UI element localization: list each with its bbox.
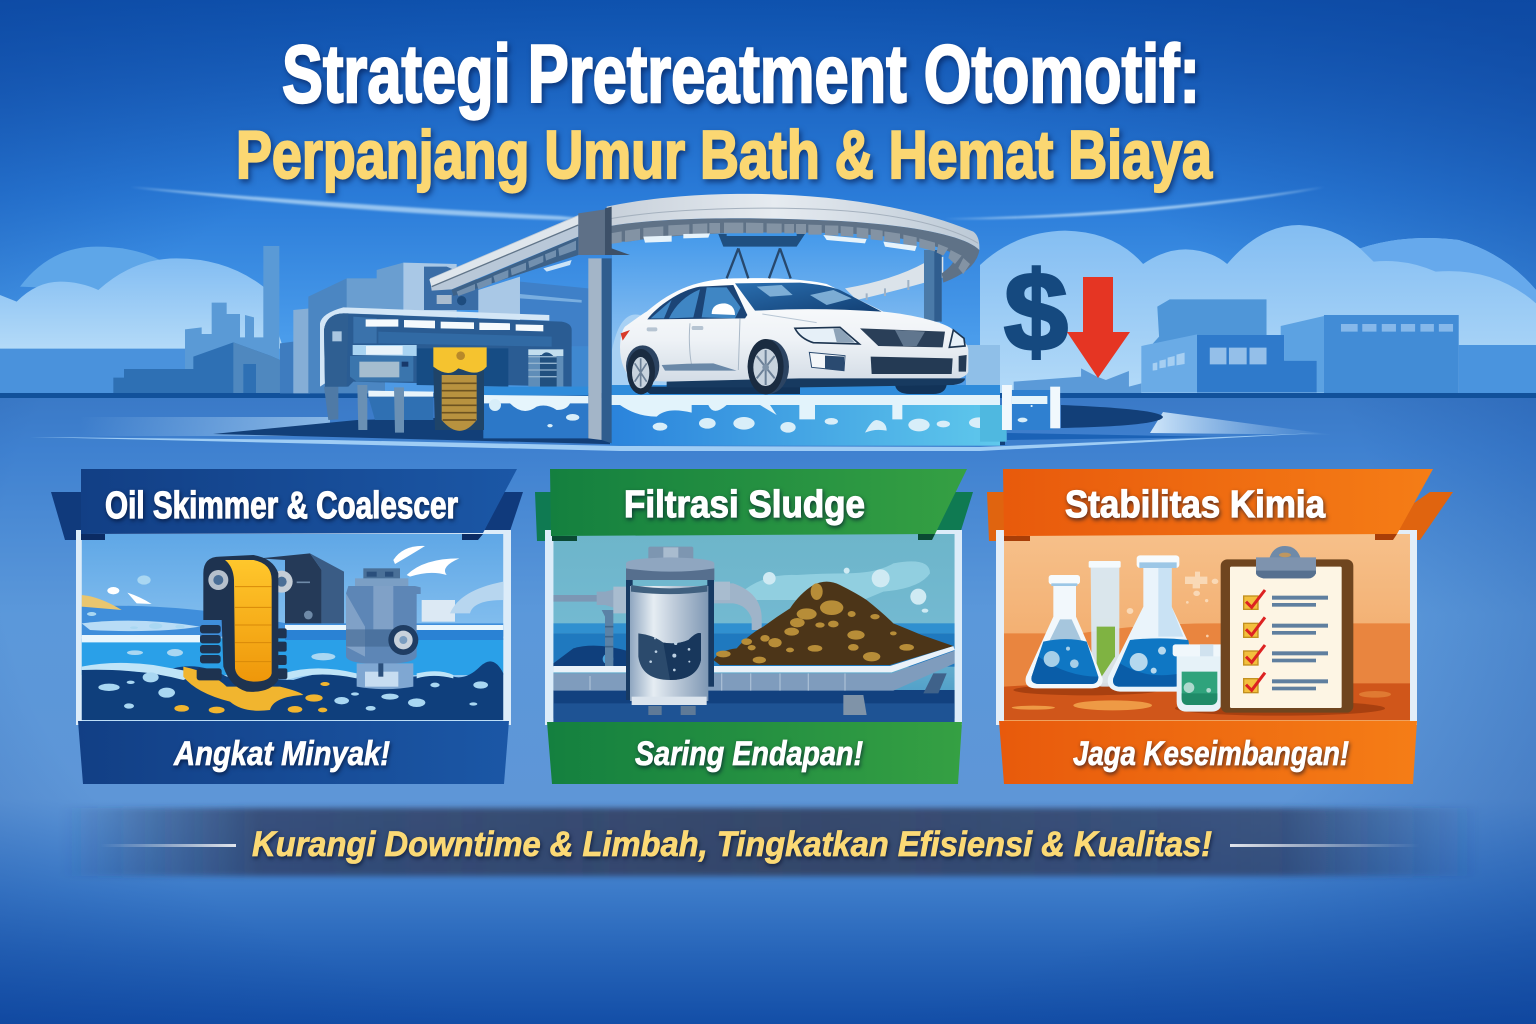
frame — [545, 530, 962, 725]
caption: Jaga Keseimbangan! — [1073, 735, 1349, 773]
factory skyline left — [0, 246, 283, 393]
dollar sign: $ — [1004, 249, 1068, 374]
caption band — [547, 722, 962, 784]
ribbon top — [1003, 469, 1433, 536]
caption band — [78, 721, 509, 784]
ribbon back — [987, 492, 1453, 541]
factory skyline right — [980, 225, 1536, 393]
ribbon back — [535, 492, 973, 541]
backdrop buildings — [280, 260, 588, 393]
card: sludge filtration — [535, 469, 973, 784]
caption band — [999, 721, 1417, 784]
ribbon top — [550, 469, 967, 536]
conveyor beam and steel column — [429, 207, 630, 443]
yellow skimmer unit — [433, 347, 487, 431]
back of the canopy — [845, 250, 943, 322]
ribbon back — [51, 492, 523, 540]
tank base light strip — [30, 433, 1320, 451]
illustration: filter and sludge — [553, 534, 955, 723]
frame — [76, 530, 511, 725]
filling machine — [320, 307, 572, 433]
conveyor strip — [607, 218, 979, 283]
caption: Angkat Minyak! — [173, 735, 390, 773]
frame — [996, 530, 1417, 725]
water tank — [610, 385, 1000, 446]
title — [236, 29, 1213, 193]
ribbon fold shadows — [81, 534, 483, 540]
water left section — [483, 387, 588, 438]
hanger — [718, 233, 805, 278]
heading: Oil Skimmer & Coalescer — [105, 485, 458, 527]
bottom banner — [60, 808, 1480, 876]
ribbon top — [81, 469, 517, 534]
ribbon fold shadows — [1004, 534, 1397, 541]
title line 2: Perpanjang Umur Bath & Hemat Biaya — [236, 117, 1213, 193]
factory and machine left — [280, 260, 588, 438]
banner text: Kurangi Downtime & Limbah, Tingkatkan Efisiensi & Kualitas! — [252, 825, 1212, 864]
ground band — [0, 393, 1536, 445]
arch surface — [607, 194, 979, 250]
heading: Filtrasi Sludge — [624, 484, 865, 526]
illustration: skimmer and coalescer — [82, 534, 503, 721]
ribbon fold shadows — [552, 534, 935, 541]
tank end section — [980, 385, 1060, 442]
caption: Saring Endapan! — [635, 735, 863, 773]
dollar cost icon — [1004, 249, 1130, 378]
heading: Stabilitas Kimia — [1065, 484, 1326, 526]
canopy lights — [643, 233, 917, 251]
card: chemical stability — [987, 469, 1453, 784]
sky under the canopy — [612, 225, 1000, 393]
title line 1: Strategi Pretreatment Otomotif: — [282, 29, 1200, 120]
illustration: flasks and checklist — [1004, 534, 1410, 722]
car — [620, 278, 968, 394]
canopy and conveyor — [607, 194, 979, 283]
card: oil skimmer — [51, 469, 523, 784]
red down arrow — [1067, 277, 1130, 378]
